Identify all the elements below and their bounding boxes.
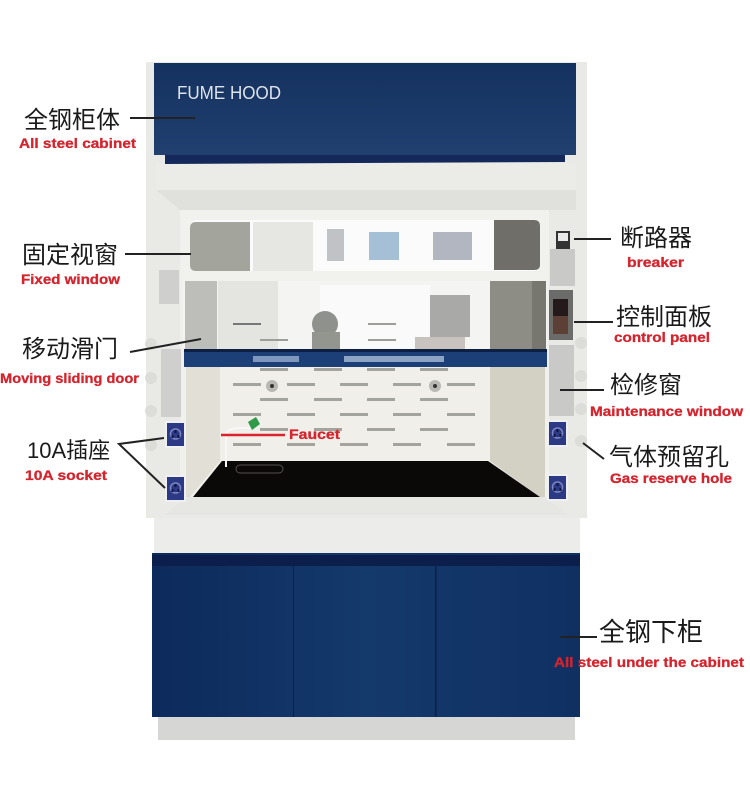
callout: all steel under the cabinet xyxy=(554,617,744,670)
callout: fixed window xyxy=(21,242,191,287)
back panel with slots xyxy=(220,367,490,462)
callout: moving sliding door: Moving sliding door xyxy=(0,370,140,386)
callout: gas reserve hole xyxy=(583,443,732,486)
hood neck xyxy=(156,163,576,212)
faucet xyxy=(226,417,260,467)
callout: 10A socket xyxy=(25,438,165,488)
control panel xyxy=(549,290,573,340)
callout: faucet: Faucet xyxy=(289,426,340,442)
black work surface xyxy=(193,461,540,497)
lower cabinet xyxy=(152,518,580,740)
sliding glass door xyxy=(183,281,547,349)
callout: maintenance window xyxy=(560,372,743,419)
fume hood upper body xyxy=(145,62,587,518)
left gas holes xyxy=(145,338,157,451)
callout: breaker: breaker xyxy=(627,254,685,270)
callout: fixed window: 固定视窗 xyxy=(22,242,118,269)
callout: maintenance window: 检修窗 xyxy=(610,372,682,399)
callout: control panel: control panel xyxy=(614,329,710,345)
right gas holes xyxy=(575,337,587,447)
callout: moving sliding door xyxy=(0,336,201,386)
callout: all steel cabinet xyxy=(19,107,195,151)
callout: control panel: 控制面板 xyxy=(616,304,712,331)
blue sash handle xyxy=(184,349,547,367)
left sockets xyxy=(165,421,186,502)
callout: faucet xyxy=(221,426,340,442)
callout: all steel cabinet: 全钢柜体 xyxy=(24,107,120,134)
sill xyxy=(164,497,568,515)
opening frame xyxy=(180,210,549,500)
callout: moving sliding door: 移动滑门 xyxy=(22,336,118,363)
callout: breaker: 断路器 xyxy=(620,225,692,252)
callout: all steel under the cabinet: All steel under the cabinet xyxy=(554,654,744,670)
sink outline xyxy=(236,465,283,473)
logo text: FUME HOOD xyxy=(177,83,281,103)
callout: breaker xyxy=(574,225,692,270)
right side panels xyxy=(549,249,575,416)
side walls xyxy=(186,367,545,497)
fixed window xyxy=(181,210,549,281)
callout: control panel xyxy=(574,304,712,345)
breaker switch xyxy=(556,231,570,249)
callout: gas reserve hole: 气体预留孔 xyxy=(609,444,729,471)
callout: 10A socket: 10A socket xyxy=(25,467,107,483)
callout: 10A socket: 10A插座 xyxy=(27,438,110,463)
right sockets xyxy=(547,420,568,501)
callout: gas reserve hole: Gas reserve hole xyxy=(610,470,732,486)
callout: all steel cabinet: All steel cabinet xyxy=(19,135,136,151)
callout: fixed window: Fixed window xyxy=(21,271,120,287)
left side panels xyxy=(159,270,181,417)
top blue cabinet panel xyxy=(154,63,576,164)
callout: maintenance window: Maintenance window xyxy=(590,403,743,419)
callout: all steel under the cabinet: 全钢下柜 xyxy=(599,617,703,647)
